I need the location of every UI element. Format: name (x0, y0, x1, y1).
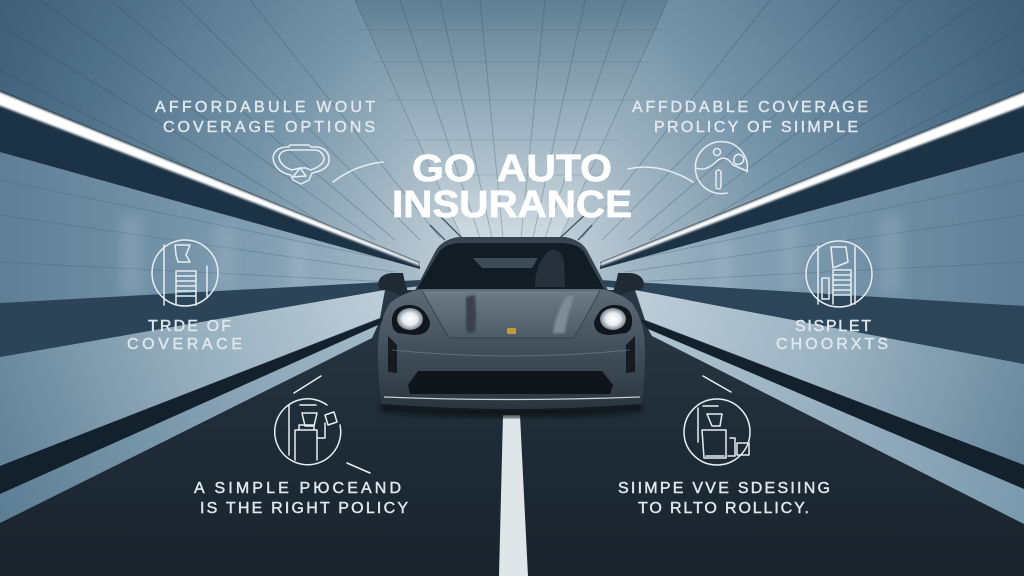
label: top right (632, 99, 868, 136)
car (378, 237, 645, 417)
icon: helmet badge (695, 142, 747, 194)
badge (507, 328, 516, 334)
car body (378, 289, 645, 411)
right kerb (640, 319, 1024, 489)
icon: goggles (273, 145, 329, 184)
label: bottom left (194, 480, 408, 517)
left wall (0, 148, 420, 305)
label: middle right: SISPLET (795, 318, 871, 335)
ceiling centre panel (355, 0, 668, 240)
right walkway (635, 290, 1024, 465)
icon: bottom left (275, 399, 341, 465)
left kerb (0, 317, 385, 494)
title (392, 148, 632, 226)
right headlight (594, 305, 632, 335)
label: middle left: TRDE OF (148, 318, 231, 335)
right skirting (600, 280, 1024, 364)
icon: bottom right (684, 399, 750, 465)
label: middle left: COVERACE (127, 336, 242, 353)
label: top left (155, 99, 375, 136)
centre road line (499, 415, 528, 576)
icon: left coverage (152, 240, 218, 306)
label: top right: AFFDDABLE COVERAGE (632, 99, 868, 116)
title: GO AUTO (412, 148, 612, 190)
ceiling (0, 0, 1024, 300)
side vents (388, 336, 397, 373)
left skirting (0, 280, 420, 357)
label: middle left (127, 318, 242, 353)
label: top left: COVERAGE OPTIONS (163, 119, 375, 136)
label: bottom right: SIIMPE VVE SDESIING (618, 480, 830, 497)
grille (408, 371, 613, 394)
label: top left: AFFORDABULE WOUT (155, 99, 375, 116)
label: bottom left: IS THE RIGHT POLICY (200, 500, 408, 517)
windshield interior (473, 258, 538, 268)
car shadow (379, 399, 643, 417)
right mirror (611, 273, 644, 299)
label: top right: PROLICY OF SIIMPLE (654, 119, 858, 136)
windshield (417, 243, 604, 289)
connector line: bottom right (703, 376, 731, 392)
label: bottom right (618, 480, 830, 517)
label: bottom left: A SIMPLE PЮCEAND (194, 480, 401, 497)
connector: top right (628, 167, 693, 182)
lower lip (384, 397, 640, 400)
title: INSURANCE (392, 184, 632, 226)
hood (422, 291, 600, 338)
label: middle right: CHOORXTS (776, 336, 888, 353)
car cabin (414, 237, 609, 292)
right light strip (600, 88, 1024, 266)
left dark beam (0, 90, 420, 269)
left light strip (0, 88, 420, 266)
left walkway (0, 290, 385, 466)
connector lines: bottom left (294, 376, 370, 473)
left headlight (392, 305, 430, 335)
road (0, 290, 1024, 576)
left mirror (378, 273, 410, 299)
right dark beam (600, 90, 1024, 269)
right wall (600, 148, 1024, 306)
connector: top left (333, 162, 383, 182)
label: middle right (776, 318, 888, 353)
label: bottom right: TO RLTO ROLLICY. (638, 500, 809, 517)
icon: right choices (806, 241, 872, 307)
